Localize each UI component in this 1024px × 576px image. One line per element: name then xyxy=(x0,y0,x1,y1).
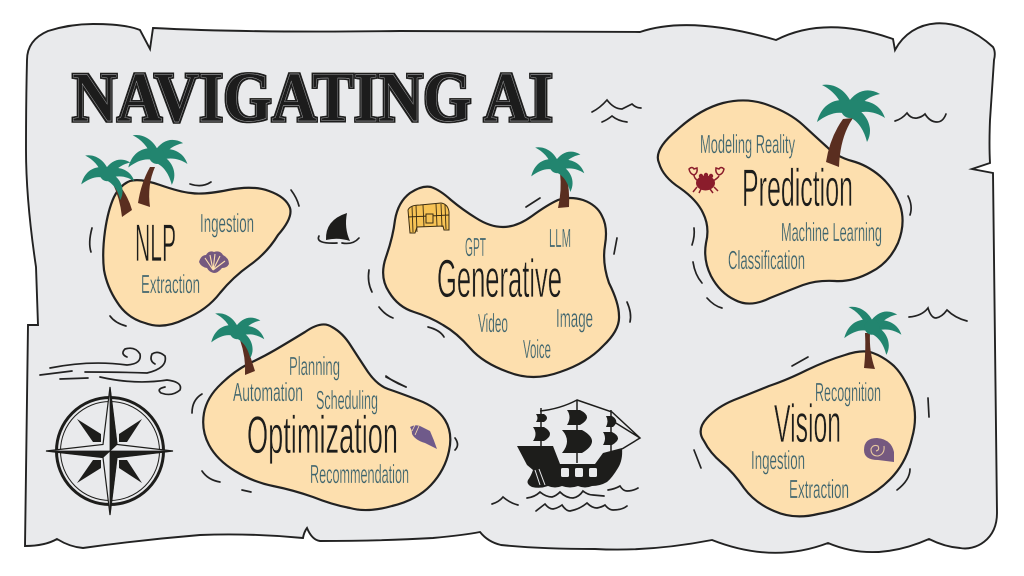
label: Classification: Classification xyxy=(728,245,805,275)
shore marks xyxy=(192,376,458,492)
sails xyxy=(533,410,618,453)
star shading xyxy=(46,387,173,515)
icon: conch shell xyxy=(410,425,437,449)
ship xyxy=(517,400,640,488)
heading: Optimization: Optimization xyxy=(247,406,398,465)
waves below ship xyxy=(492,486,638,511)
icon: scallop shell xyxy=(199,251,229,273)
island: Prediction: Machine Learning xyxy=(781,217,882,247)
label: Automation: Automation xyxy=(233,377,303,407)
label: Image: Image xyxy=(556,303,593,333)
title: NAVIGATING AI xyxy=(72,59,553,137)
shore marks xyxy=(368,198,631,387)
island: Generative: GPT xyxy=(465,232,486,262)
island: Vision: Recognition xyxy=(815,377,881,407)
waves right of prediction xyxy=(895,113,946,122)
shore marks xyxy=(90,182,299,326)
island: Prediction xyxy=(658,85,911,308)
icon: snail shell xyxy=(864,438,894,462)
icon: treasure chest xyxy=(408,203,449,233)
four-point star xyxy=(46,387,173,515)
shark fin xyxy=(318,213,359,243)
windows xyxy=(561,468,597,477)
palm tree xyxy=(211,313,264,375)
island: Optimization: Scheduling xyxy=(316,385,378,415)
waves near title xyxy=(592,100,641,122)
label: Ingestion: Ingestion xyxy=(200,208,254,238)
palm tree xyxy=(844,307,901,369)
label: Ingestion: Ingestion xyxy=(751,445,805,475)
label: Planning: Planning xyxy=(289,351,340,381)
island: Optimization: Recommendation xyxy=(310,459,409,489)
shore marks xyxy=(694,357,929,490)
island: Generative xyxy=(368,147,631,387)
label: Extraction: Extraction xyxy=(141,269,200,299)
palm tree xyxy=(817,85,885,167)
diagonal points xyxy=(77,419,142,483)
masts and rigging xyxy=(540,400,640,463)
island: NLP xyxy=(81,135,299,326)
palm tree xyxy=(531,147,584,208)
palm tree: right xyxy=(128,135,187,207)
island: Generative: LLM xyxy=(549,223,571,253)
island: Prediction: Prediction xyxy=(742,159,853,218)
island: Generative: Video xyxy=(478,308,508,338)
island: Vision xyxy=(694,307,929,516)
compass rose xyxy=(46,387,173,515)
island: Generative: Voice xyxy=(523,334,551,364)
island: Prediction: Modeling Reality xyxy=(700,129,795,159)
label: Extraction: Extraction xyxy=(789,474,849,504)
icon: crab xyxy=(689,168,724,193)
wind swirls xyxy=(40,348,180,394)
hull xyxy=(517,446,622,488)
island: Vision: Vision xyxy=(774,394,841,454)
palm tree: left xyxy=(81,155,134,217)
island: Optimization xyxy=(192,313,458,510)
rudder stripes xyxy=(535,469,545,485)
island: NLP: NLP xyxy=(135,214,176,273)
island: Generative: Generative xyxy=(437,249,562,309)
shore marks xyxy=(692,196,911,308)
waves above vision xyxy=(909,308,967,321)
